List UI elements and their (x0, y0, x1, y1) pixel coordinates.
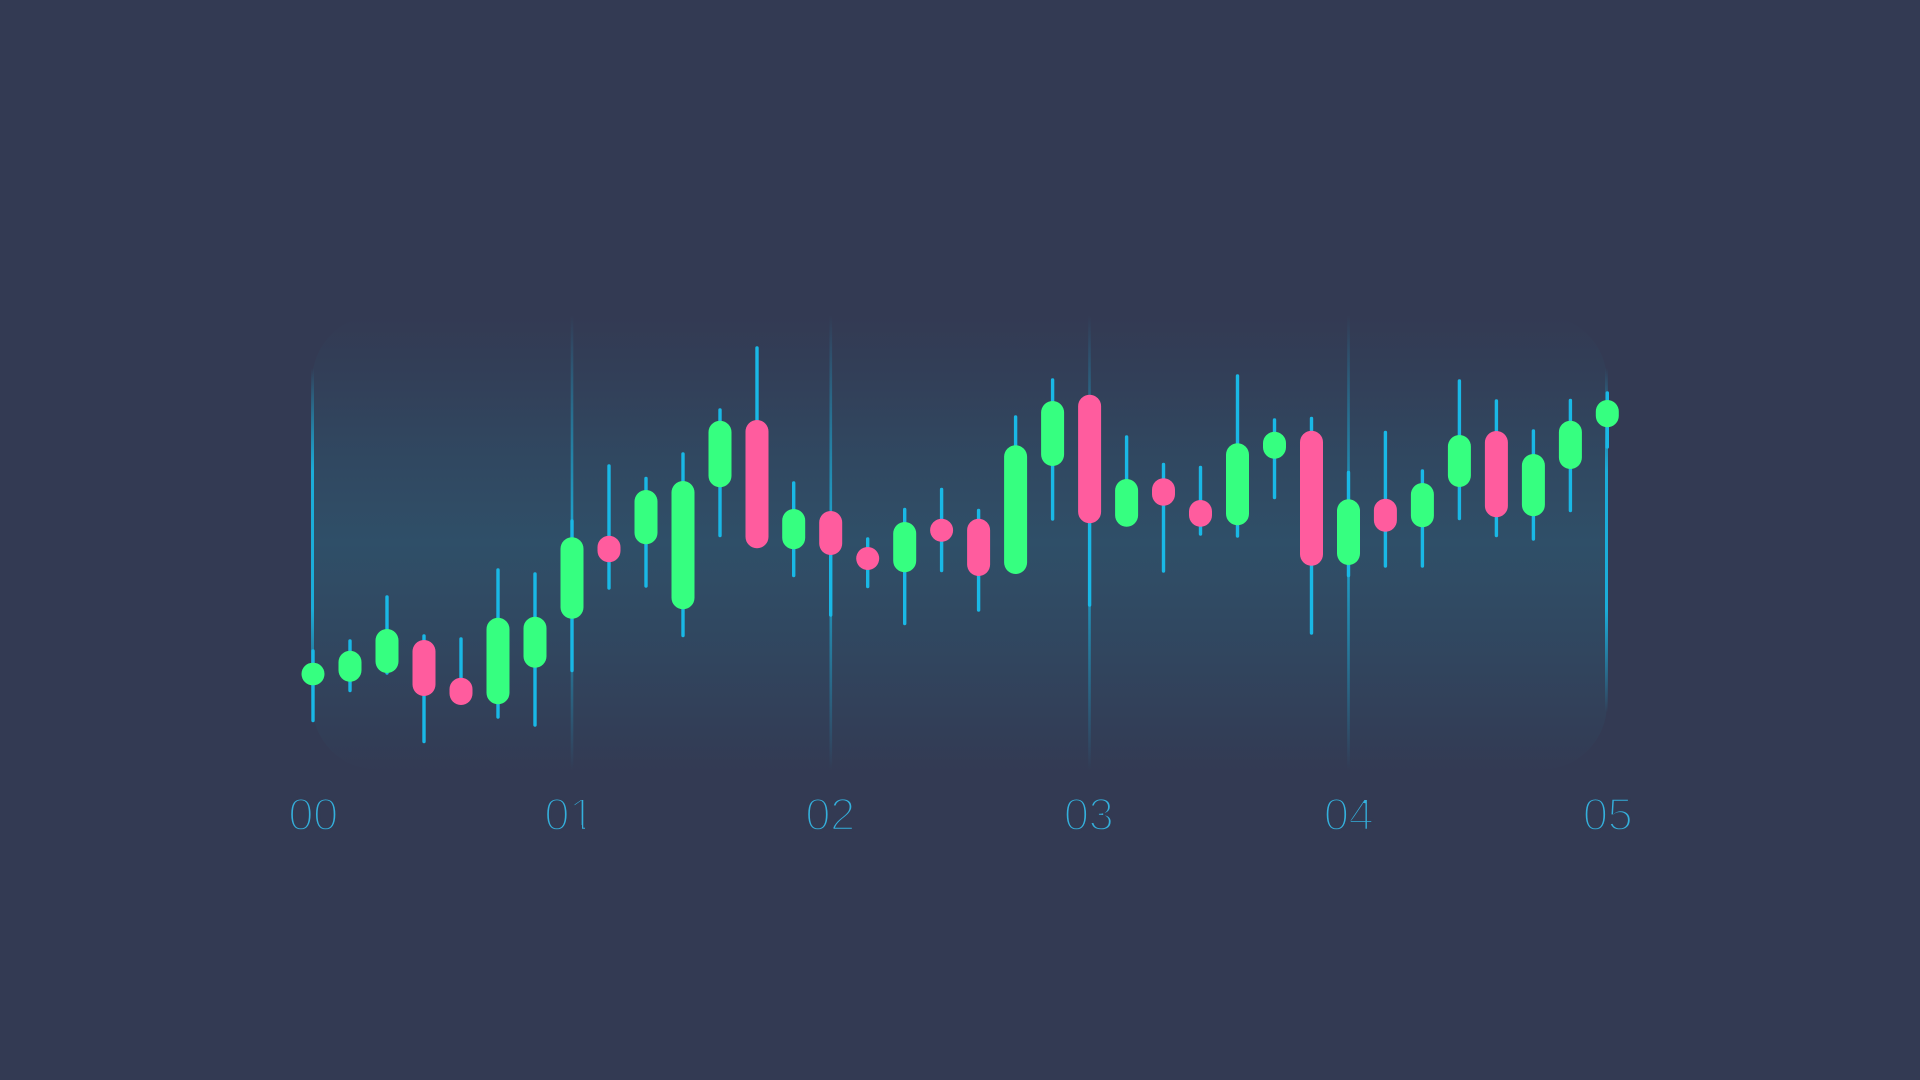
candle 33 pink (1485, 401, 1508, 536)
candle 36 green (1596, 393, 1619, 447)
x-axis labels (288, 789, 1632, 840)
candle 14 green (782, 483, 805, 576)
label 03: 03 (1064, 789, 1113, 840)
candle 25 pink (1189, 468, 1212, 534)
label 04: 04 (1324, 789, 1373, 840)
candle 15 pink (819, 511, 842, 615)
candle 9 pink (598, 466, 620, 588)
label 01: 01 (544, 789, 594, 840)
candle 34 green (1522, 431, 1545, 539)
candle 21 green (1041, 380, 1064, 519)
candle 7 green (524, 574, 546, 725)
candle 32 green (1448, 381, 1471, 518)
candle 10 green (634, 478, 658, 586)
candle 5 pink (450, 639, 472, 705)
candle 28 pink (1300, 418, 1323, 633)
candle 4 pink (412, 636, 436, 742)
candle 2 green (338, 641, 362, 690)
candle 8 green (560, 521, 584, 670)
candle 23 green (1115, 437, 1138, 527)
candle 11 green (672, 454, 694, 636)
label 02: 02 (805, 789, 855, 840)
candle 18 pink (930, 490, 953, 570)
candle 31 green (1411, 471, 1434, 566)
candle 30 pink (1374, 432, 1397, 566)
candle 35 green (1559, 400, 1582, 510)
candle 20 green (1004, 417, 1027, 574)
candle 24 pink (1152, 464, 1175, 571)
label 05: 05 (1583, 789, 1632, 840)
label 00: 00 (288, 789, 338, 840)
candle 19 pink (967, 510, 990, 610)
candle 17 green (893, 510, 916, 624)
candle 26 green (1226, 376, 1249, 536)
candle 6 green (486, 570, 510, 717)
candle 12 green (708, 410, 732, 536)
candle 27 green (1263, 420, 1286, 498)
candle 29 green (1337, 472, 1360, 576)
candle 1 green (302, 651, 324, 720)
candle 16 pink (856, 539, 879, 586)
candle 3 green (376, 597, 398, 673)
vertical time gridlines (311, 315, 1608, 770)
candle 22 pink (1078, 395, 1101, 605)
panel: chart background glow (312, 315, 1607, 770)
candle 13 pink (746, 348, 768, 548)
